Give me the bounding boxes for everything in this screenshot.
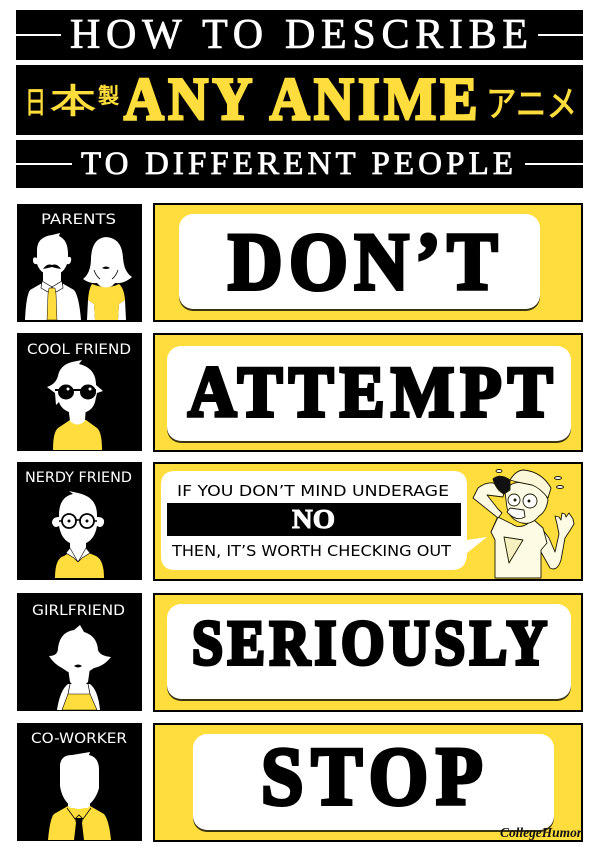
panel: don't bbox=[154, 204, 582, 321]
panel: parents bbox=[17, 204, 142, 322]
title: how to describe: HOW TO DESCRIBE bbox=[70, 12, 528, 58]
speech top line: IF YOU DON’T MIND UNDERAGE bbox=[177, 482, 449, 500]
label: parents: PARENTS bbox=[41, 212, 116, 228]
title: to different people bbox=[16, 140, 583, 188]
label: girlfriend: GIRLFRIEND bbox=[32, 603, 125, 619]
label: cool friend: COOL FRIEND bbox=[27, 342, 131, 358]
japanese text: anime: アニメ bbox=[486, 83, 577, 124]
censored bar bbox=[167, 503, 461, 536]
panel: cool friend bbox=[17, 333, 142, 451]
speech bubble bbox=[161, 471, 487, 570]
speech bottom line: THEN, IT’S WORTH CHECKING OUT bbox=[171, 542, 452, 560]
panel: seriously bbox=[154, 594, 582, 711]
icon: nervous guy with cap bbox=[473, 470, 574, 578]
title: to different people: TO DIFFERENT PEOPLE bbox=[81, 146, 513, 182]
logo: collegehumor: CollegeHumor bbox=[500, 826, 583, 841]
title: any anime bbox=[16, 65, 583, 135]
title: any anime: ANY ANIME bbox=[124, 67, 477, 133]
panel: no bbox=[154, 463, 582, 580]
japanese text: origin: 本 bbox=[50, 83, 96, 121]
answer text: DON’T bbox=[228, 217, 498, 308]
japanese text: sun: 日 bbox=[25, 87, 46, 120]
panel: attempt bbox=[154, 334, 582, 451]
icon: mother bbox=[83, 237, 132, 320]
icon: father bbox=[25, 233, 81, 320]
icon: nerdy friend bbox=[52, 491, 104, 578]
answer text: STOP bbox=[261, 731, 483, 823]
icon: co-worker bbox=[48, 752, 111, 840]
icon: girlfriend bbox=[49, 625, 111, 710]
icon: cool friend bbox=[47, 360, 103, 450]
answer text: ATTEMPT bbox=[188, 353, 553, 433]
label: nerdy friend: NERDY FRIEND bbox=[25, 470, 132, 486]
answer text: SERIOUSLY bbox=[192, 607, 547, 678]
panel: nerdy friend bbox=[17, 462, 142, 580]
panel: girlfriend bbox=[17, 593, 142, 711]
japanese text: made: 製 bbox=[98, 85, 119, 108]
censored bar: NO bbox=[292, 504, 335, 534]
panel: co-worker bbox=[17, 723, 142, 841]
panel: stop bbox=[154, 724, 583, 841]
label: co-worker: CO-WORKER bbox=[31, 731, 127, 747]
